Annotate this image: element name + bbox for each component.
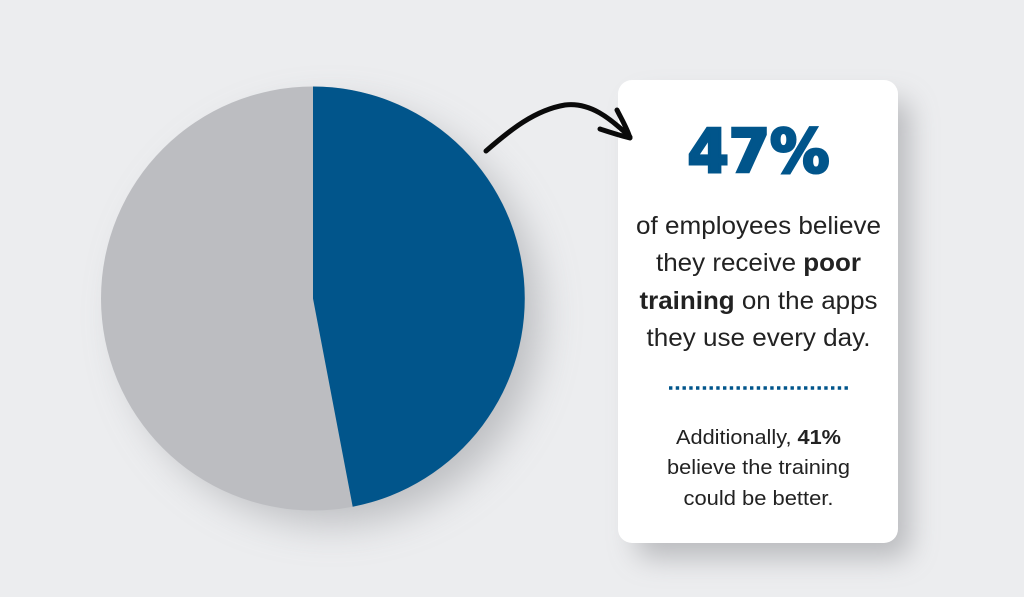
arrow from pie to card bbox=[486, 105, 630, 151]
main description: of employees believe bbox=[636, 212, 881, 240]
headline stat: 47% bbox=[688, 117, 830, 187]
main description bbox=[636, 212, 881, 352]
dotted divider bbox=[669, 386, 851, 390]
secondary note: could be better. bbox=[684, 488, 834, 510]
pie chart bbox=[101, 86, 540, 524]
pie slice: 47% bbox=[313, 86, 525, 507]
secondary note bbox=[667, 427, 850, 510]
main description: they receive poor bbox=[656, 249, 861, 277]
secondary note: Additionally, 41% bbox=[676, 427, 841, 449]
statistic card bbox=[618, 80, 910, 558]
main description: training on the apps bbox=[640, 287, 878, 315]
main description: they use every day. bbox=[646, 324, 870, 352]
secondary note: believe the training bbox=[667, 457, 850, 479]
pie slice: remaining 53% bbox=[101, 86, 525, 510]
